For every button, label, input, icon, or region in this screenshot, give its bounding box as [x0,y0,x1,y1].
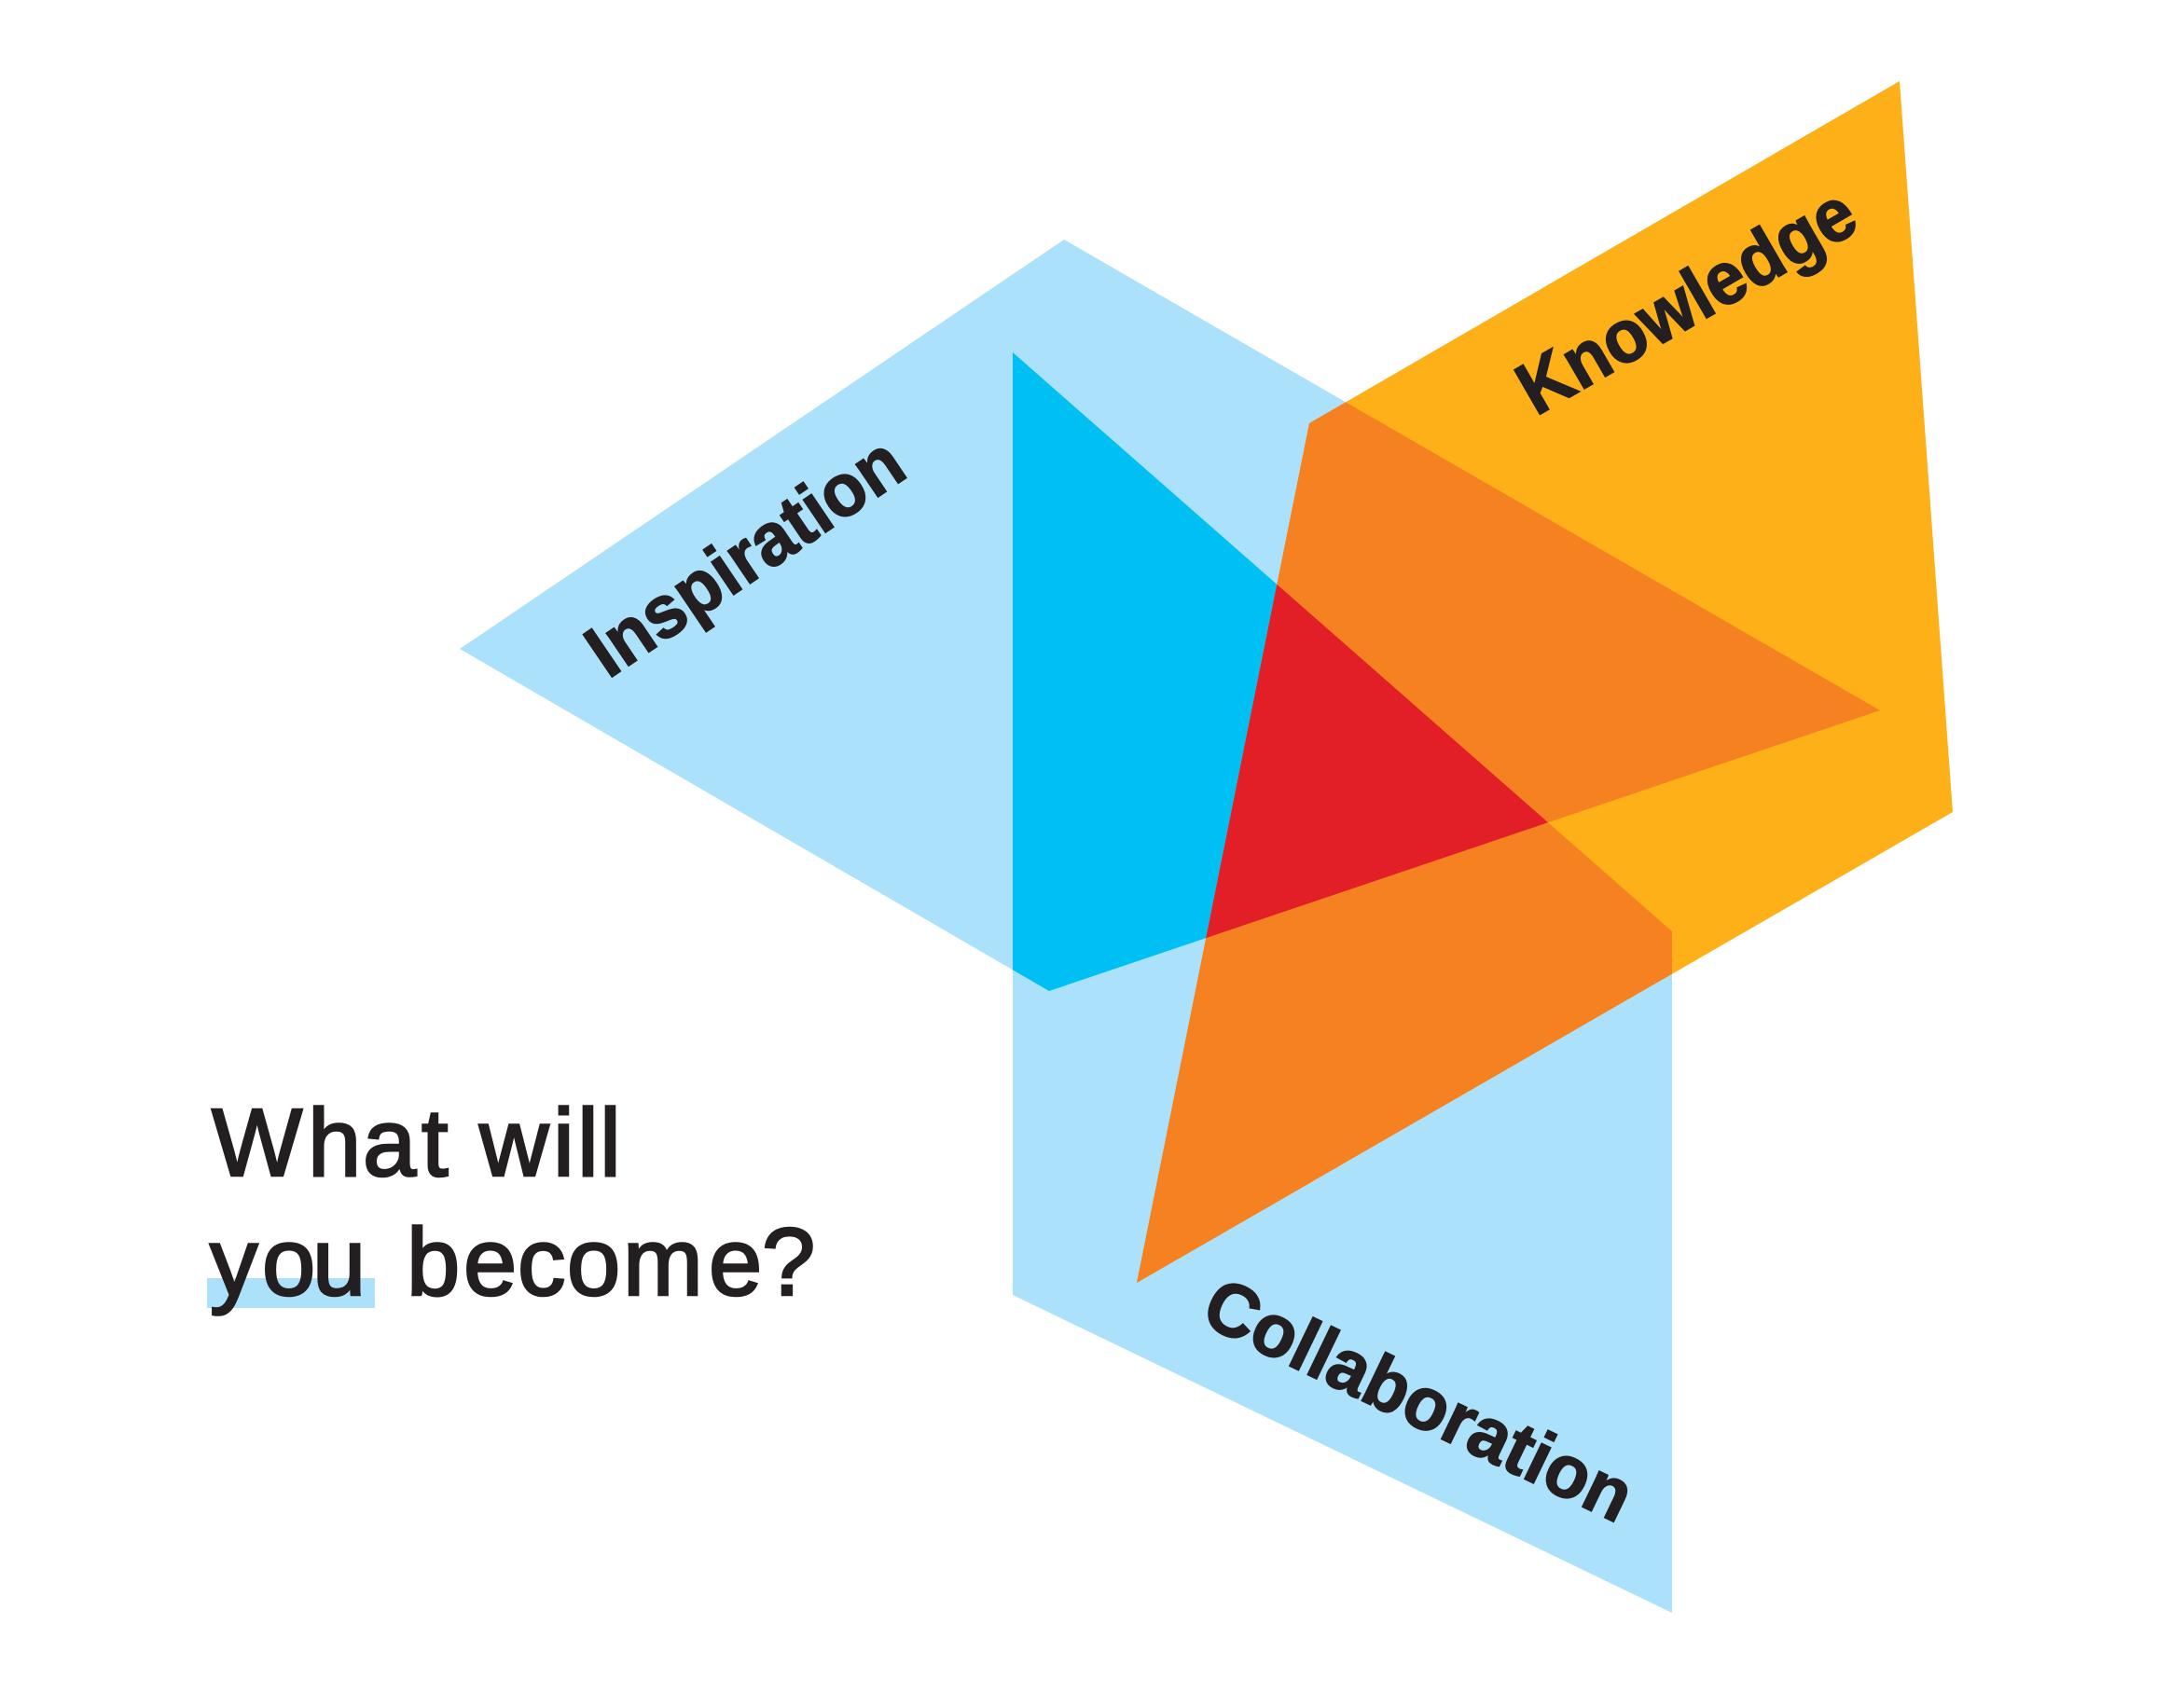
panel: knowledge shape [1137,81,1953,1283]
heading: What will you become? [210,1089,815,1315]
heading: What will you become?: become? [407,1208,815,1315]
highlight behind "you" [207,1278,375,1308]
panel: collaboration shape [1013,352,1672,1613]
label: Inspiration: Inspiration [571,420,919,693]
overlap: collaboration and knowledge [1137,584,1672,1283]
overlap: centre of all three shapes [1206,584,1548,938]
label: Knowledge: Knowledge [1502,171,1870,431]
infographic canvas [207,81,1953,1613]
overlap: inspiration and knowledge [1206,403,1880,938]
heading: What will you become?: will [478,1089,621,1196]
heading: What will you become?: What [212,1089,449,1196]
overlap: inspiration and collaboration [1013,352,1548,991]
label: Collaboration: Collaboration [1192,1261,1647,1538]
panel: inspiration shape [460,240,1880,991]
heading: What will you become?: you [210,1208,366,1315]
